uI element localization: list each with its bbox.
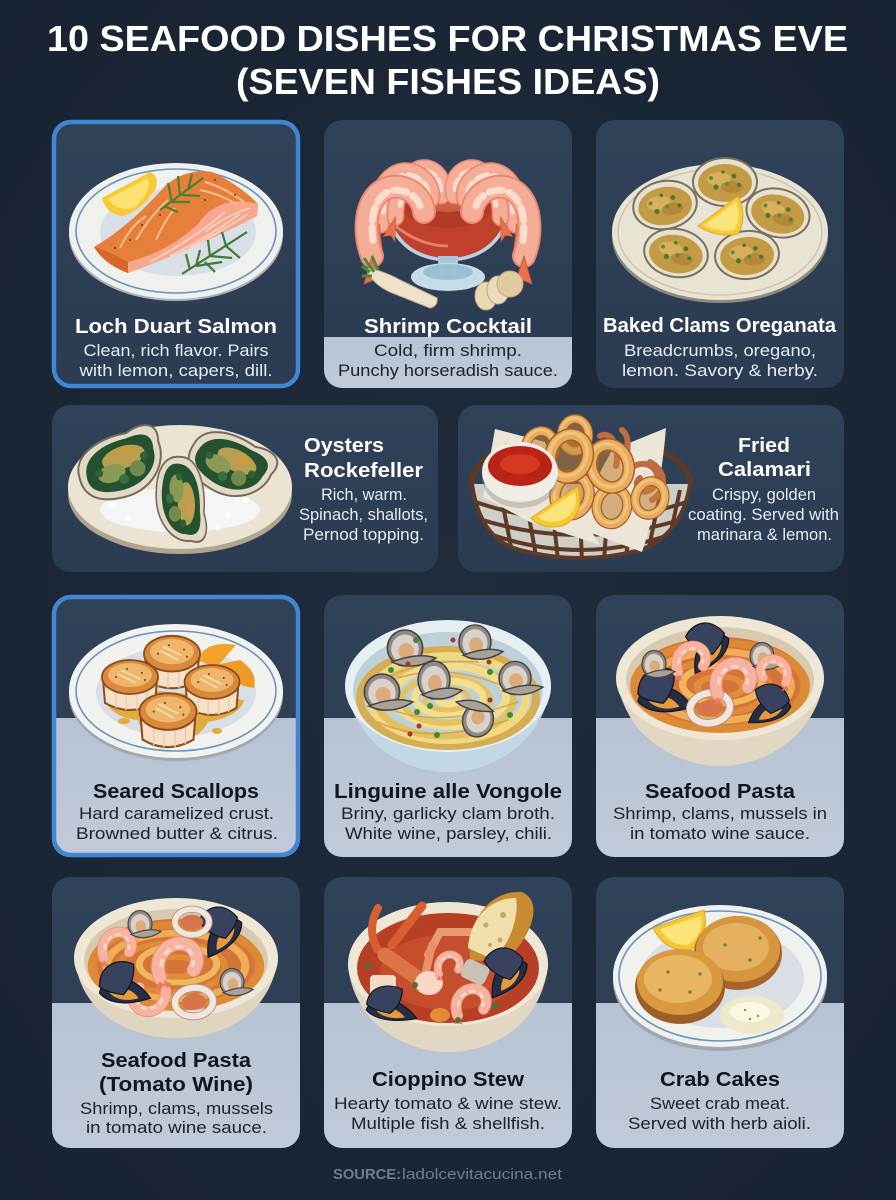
title: 10 SEAFOOD DISHES FOR CHRISTMAS EVE bbox=[47, 18, 848, 59]
icon: salmon plate bbox=[69, 163, 283, 301]
heading: Fried bbox=[738, 434, 790, 457]
icon: crab cakes plate bbox=[613, 905, 827, 1051]
panel: Oysters Rockefeller bbox=[52, 405, 438, 572]
heading bbox=[718, 434, 811, 481]
text block bbox=[334, 1094, 562, 1133]
heading: Rockefeller bbox=[304, 459, 423, 482]
text block bbox=[299, 485, 428, 544]
text block: Crispy, golden bbox=[712, 485, 816, 504]
text block bbox=[688, 485, 839, 544]
text block: in tomato wine sauce. bbox=[630, 824, 810, 843]
text block: in tomato wine sauce. bbox=[86, 1118, 267, 1137]
text block: Spinach, shallots, bbox=[299, 505, 428, 524]
text block: Pernod topping. bbox=[303, 525, 424, 544]
icon: shrimp cocktail bbox=[362, 162, 532, 310]
text block: Served with herb aioli. bbox=[628, 1114, 811, 1133]
panel: Crab Cakes bbox=[596, 877, 844, 1148]
heading bbox=[99, 1049, 253, 1096]
text block: White wine, parsley, chili. bbox=[345, 824, 552, 843]
icon: oysters bbox=[68, 418, 292, 554]
heading: Shrimp Cocktail bbox=[364, 315, 532, 338]
text block: Breadcrumbs, oregano, bbox=[624, 341, 816, 360]
panel: Loch Duart Salmon bbox=[54, 122, 298, 386]
text block: with lemon, capers, dill. bbox=[78, 361, 272, 380]
heading: Linguine alle Vongole bbox=[334, 780, 562, 803]
icon: tomato wine pasta bowl bbox=[74, 898, 278, 1038]
text block bbox=[76, 804, 278, 843]
icon: calamari basket bbox=[470, 418, 692, 564]
heading: Seafood Pasta bbox=[101, 1049, 252, 1072]
panel: Seafood Pasta (Tomato Wine) bbox=[52, 877, 300, 1148]
icon: scallops plate bbox=[69, 624, 283, 761]
text block bbox=[628, 1094, 811, 1133]
title: (SEVEN FISHES IDEAS) bbox=[236, 61, 660, 102]
panel: Baked Clams Oreganata bbox=[596, 120, 844, 388]
heading: (Tomato Wine) bbox=[99, 1073, 253, 1096]
heading: Crab Cakes bbox=[660, 1068, 780, 1091]
text block: Shrimp, clams, mussels bbox=[80, 1099, 273, 1118]
text block: Clean, rich flavor. Pairs bbox=[84, 341, 268, 360]
text block bbox=[613, 804, 827, 843]
heading: Calamari bbox=[718, 458, 811, 481]
heading: Seared Scallops bbox=[93, 780, 259, 803]
text block: Briny, garlicky clam broth. bbox=[341, 804, 555, 823]
icon: cioppino bowl bbox=[348, 892, 548, 1052]
text block bbox=[622, 341, 818, 380]
panel: Seared Scallops bbox=[52, 595, 300, 857]
heading: Baked Clams Oreganata bbox=[603, 314, 837, 337]
heading bbox=[304, 434, 423, 482]
text block: Shrimp, clams, mussels in bbox=[613, 804, 827, 823]
icon: seafood pasta bowl bbox=[616, 614, 824, 766]
panel: Linguine alle Vongole bbox=[324, 595, 572, 857]
heading: Oysters bbox=[304, 434, 384, 457]
icon: linguine bowl bbox=[345, 620, 551, 772]
text block: Hard caramelized crust. bbox=[79, 804, 274, 823]
text block: Punchy horseradish sauce. bbox=[338, 361, 558, 380]
text block bbox=[78, 341, 272, 380]
text block: marinara & lemon. bbox=[697, 525, 832, 544]
heading: Cioppino Stew bbox=[372, 1068, 524, 1091]
heading: Loch Duart Salmon bbox=[75, 315, 277, 338]
panel: Cioppino Stew bbox=[324, 877, 572, 1148]
heading: Seafood Pasta bbox=[645, 780, 796, 803]
text block: lemon. Savory & herby. bbox=[622, 361, 818, 380]
title bbox=[47, 18, 848, 102]
text block bbox=[338, 341, 558, 380]
text block: Sweet crab meat. bbox=[650, 1094, 790, 1113]
text block: Multiple fish & shellfish. bbox=[351, 1114, 545, 1133]
text block: coating. Served with bbox=[688, 505, 839, 524]
text block: Cold, firm shrimp. bbox=[374, 341, 522, 360]
panel: Seafood Pasta bbox=[596, 595, 844, 857]
source: ladolcevitacucina.net bbox=[402, 1166, 563, 1183]
text block: Rich, warm. bbox=[321, 485, 407, 504]
text block bbox=[341, 804, 555, 843]
text block: Browned butter & citrus. bbox=[76, 824, 278, 843]
source bbox=[333, 1166, 563, 1183]
source: SOURCE: bbox=[333, 1166, 401, 1183]
icon: baked clams bbox=[612, 157, 828, 303]
panel: Fried Calamari bbox=[458, 405, 844, 572]
text block bbox=[80, 1099, 273, 1137]
text block: Hearty tomato & wine stew. bbox=[334, 1094, 562, 1113]
panel: Shrimp Cocktail bbox=[324, 120, 572, 388]
